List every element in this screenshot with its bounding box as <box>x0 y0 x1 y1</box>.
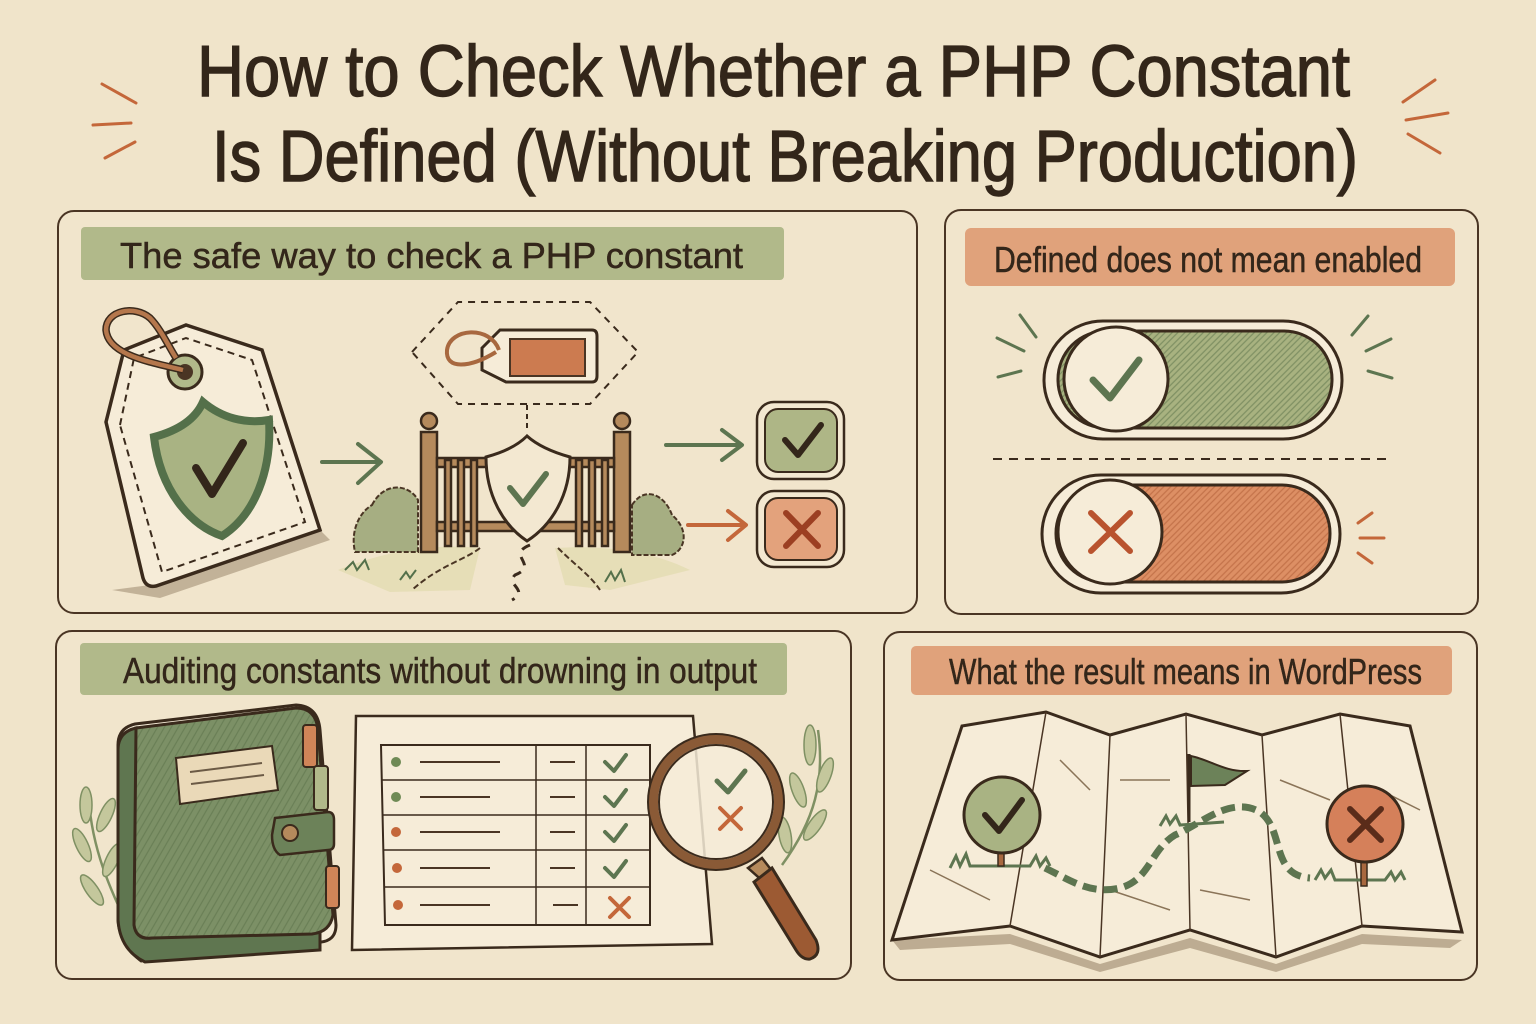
icon: check pin <box>950 777 1050 868</box>
icon: green notebook <box>118 705 339 962</box>
heading: WordPress result: What the result means in WordPress <box>949 651 1422 692</box>
heading: auditing <box>80 643 787 695</box>
title: Is Defined (Without Breaking Production) <box>212 117 1358 197</box>
icon: left title sparks <box>93 84 136 158</box>
icon: off sparks <box>1358 513 1384 563</box>
divider line <box>993 458 1390 460</box>
icon: hexagon label tag <box>412 302 638 432</box>
icon: gate with shield <box>338 413 690 600</box>
icon: on sparks <box>997 315 1392 378</box>
arrow: to cross result <box>688 511 746 540</box>
panel: defined not enabled <box>945 210 1478 614</box>
icon: large tag with shield <box>106 311 330 598</box>
icon: cross pin <box>1315 786 1405 886</box>
icon: right leaves <box>776 725 837 865</box>
icon: checklist sheet <box>352 716 712 950</box>
heading: safe way: The safe way to check a PHP constant <box>120 235 743 276</box>
heading: defined not enabled: Defined does not mean enabled <box>994 239 1422 280</box>
title <box>197 32 1358 197</box>
heading: defined not enabled <box>965 228 1455 286</box>
icon: right title sparks <box>1403 80 1448 153</box>
arrow: tag to gate <box>322 444 381 483</box>
icon: magnifying glass <box>648 734 818 959</box>
icon: flag <box>1160 754 1247 826</box>
panel: auditing <box>56 631 851 979</box>
arrow: to check result <box>666 430 742 460</box>
icon: folded map <box>892 712 1462 972</box>
heading: safe way <box>81 227 784 280</box>
icon: off toggle <box>1042 475 1340 593</box>
title: How to Check Whether a PHP Constant <box>197 32 1350 112</box>
heading: WordPress result <box>911 646 1452 695</box>
heading: auditing: Auditing constants without drowning in output <box>123 650 757 691</box>
icon: left leaves <box>69 787 130 930</box>
icon: check result <box>757 402 844 479</box>
panel: WordPress result <box>884 632 1477 980</box>
panel: safe way <box>58 211 917 613</box>
icon: on toggle <box>1044 321 1342 439</box>
icon: cross result <box>757 491 844 567</box>
